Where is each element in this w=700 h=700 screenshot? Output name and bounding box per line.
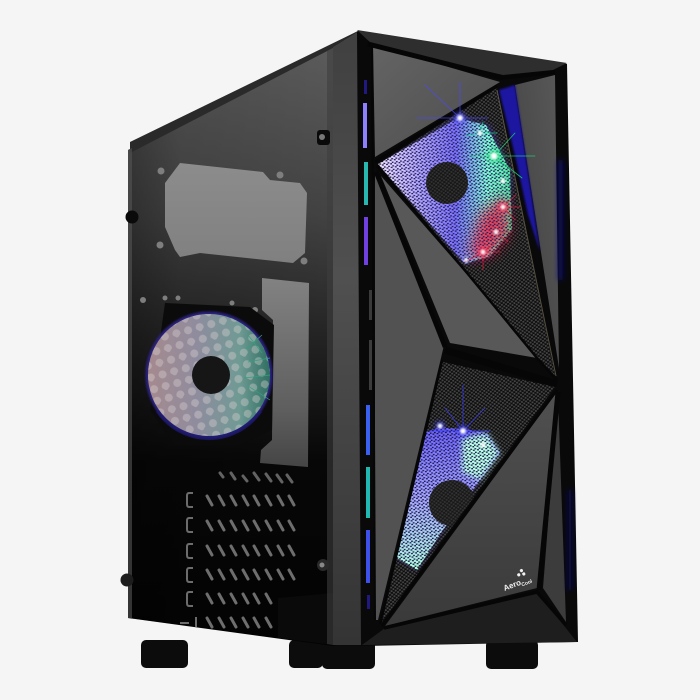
logo: Aero bbox=[502, 578, 522, 593]
PSU shroud bbox=[278, 593, 333, 645]
middle facet bbox=[381, 176, 537, 358]
LED strip bbox=[363, 80, 372, 609]
fan hub lower bbox=[429, 480, 475, 526]
black crease lines bbox=[368, 44, 566, 628]
cable cutout bbox=[260, 278, 309, 467]
mounting holes bbox=[140, 168, 308, 313]
right edge glow bbox=[558, 160, 572, 590]
top bevel bbox=[357, 30, 567, 75]
left pillar bbox=[333, 32, 361, 645]
right lower facet bbox=[543, 397, 566, 622]
mesh rim line bbox=[497, 90, 556, 376]
lower mesh lights bbox=[395, 427, 500, 570]
screws bbox=[120, 130, 330, 586]
logo mark bbox=[516, 568, 526, 578]
sparkles bbox=[417, 82, 535, 448]
glass left edge bbox=[128, 148, 132, 619]
fan hub upper bbox=[426, 162, 468, 204]
front chassis bbox=[333, 31, 578, 646]
bottom bevel bbox=[362, 592, 577, 645]
lower-right facet bbox=[385, 392, 557, 626]
upper mesh lights bbox=[378, 116, 512, 264]
upper-left facet bbox=[373, 45, 500, 157]
upper-right facet bbox=[515, 75, 559, 368]
case feet bbox=[141, 640, 538, 669]
glass right edge bbox=[327, 48, 333, 645]
upper mesh bbox=[378, 88, 556, 376]
interior contents bbox=[140, 163, 309, 629]
rear fan bbox=[146, 303, 274, 445]
ventilation slots bbox=[207, 473, 294, 627]
star cores bbox=[438, 115, 506, 448]
left facet bbox=[375, 175, 444, 620]
logo bbox=[499, 567, 534, 595]
front panel bbox=[333, 30, 578, 646]
PSU cutout bbox=[165, 163, 307, 263]
star rays bbox=[417, 82, 535, 431]
logo: Cool bbox=[521, 578, 534, 588]
top edge of case bbox=[130, 31, 358, 153]
side glass panel bbox=[128, 31, 362, 646]
lower mesh bbox=[382, 362, 555, 622]
blue backlit gap bbox=[499, 85, 540, 252]
expansion slot clips bbox=[180, 493, 196, 631]
glow halos bbox=[436, 113, 508, 436]
infographic: PC case product photo bbox=[120, 30, 578, 669]
